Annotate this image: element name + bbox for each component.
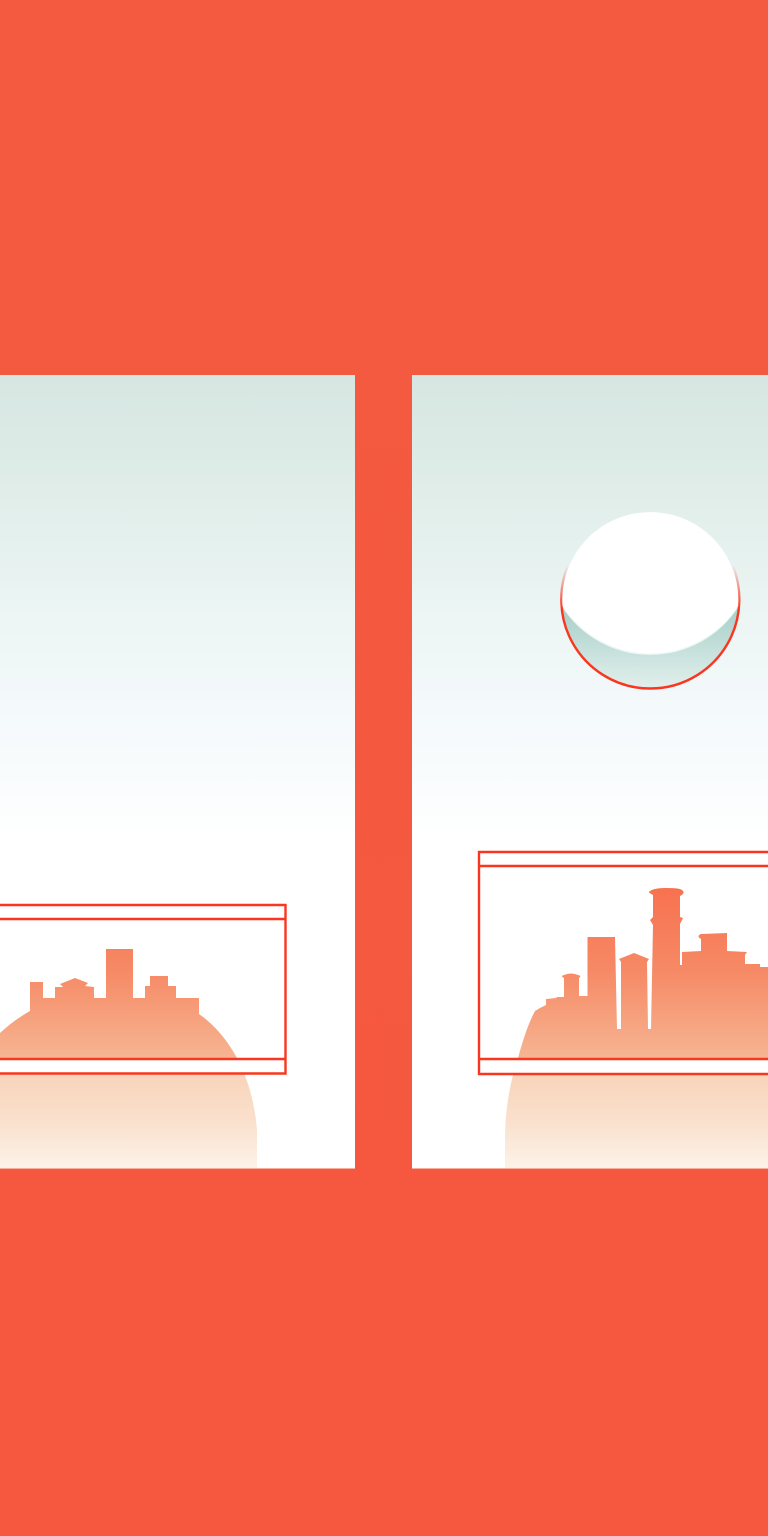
left frame	[0, 905, 286, 1074]
right skyline silhouette	[505, 888, 768, 1168]
right frame	[479, 852, 768, 1074]
left skyline silhouette	[0, 949, 257, 1168]
icon: moon	[561, 510, 739, 689]
panel: right scene	[412, 375, 768, 1168]
left sky	[0, 375, 355, 1168]
right sky	[412, 375, 768, 1168]
panel: left scene	[0, 375, 355, 1168]
